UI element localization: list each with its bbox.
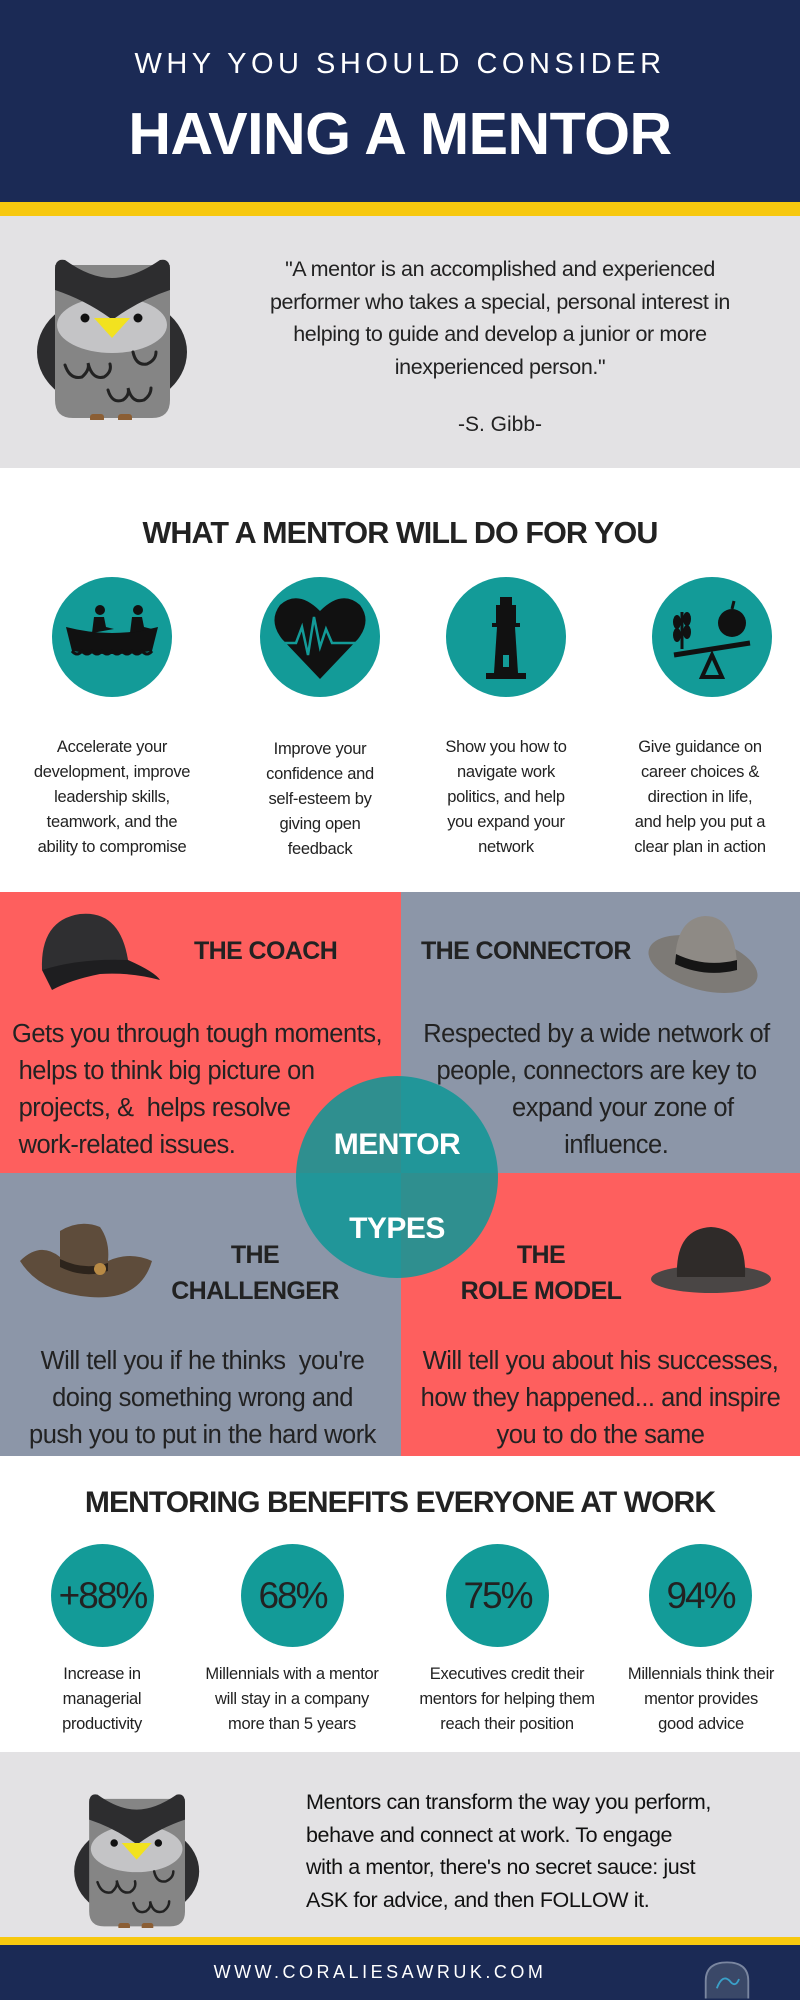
text: show you: you expand your <box>447 813 565 831</box>
text: challenger: Will tell you if he thinks you're <box>41 1347 364 1375</box>
text: coach <box>12 1020 382 1159</box>
icon: canoe <box>52 577 172 697</box>
stat label: 94: good advice <box>658 1715 744 1733</box>
title: the challenger: THE <box>231 1241 279 1269</box>
stat label: 94: Millennials think their <box>628 1665 774 1683</box>
title: the coach: THE COACH <box>194 937 337 965</box>
icon: owl <box>74 1794 200 1928</box>
stat label: 68: more than 5 years <box>228 1715 356 1733</box>
stat label: 68: Millennials with a mentor <box>205 1665 379 1683</box>
title: the role model <box>461 1241 622 1305</box>
text: coach: projects, & helps resolve <box>19 1094 290 1122</box>
text: role model: how they happened... and inspire <box>421 1384 780 1412</box>
stat label: 94: mentor provides <box>644 1690 758 1708</box>
text: improve: feedback <box>288 840 352 858</box>
icon: lighthouse <box>446 577 566 697</box>
title: the challenger: CHALLENGER <box>171 1277 339 1305</box>
text: connector: people, connectors are key to <box>436 1057 757 1085</box>
text: role model: Will tell you about his successes, <box>423 1347 778 1375</box>
quote text: helping to guide and develop a junior or more <box>293 322 707 346</box>
icon: heart <box>260 577 380 697</box>
closing text: Mentors can transform the way you perform, <box>306 1790 711 1814</box>
stat: 88 <box>51 1544 154 1647</box>
text: challenger: doing something wrong and <box>52 1384 353 1412</box>
text: role model <box>421 1347 780 1449</box>
text: improve: Improve your <box>274 740 366 758</box>
text: role model: you to do the same <box>497 1421 704 1449</box>
stat label: 88 <box>62 1665 142 1733</box>
stat: 68: 68% <box>258 1575 327 1616</box>
stat: 94 <box>649 1544 752 1647</box>
text: guidance: clear plan in action <box>634 838 766 856</box>
closing text: ASK for advice, and then FOLLOW it. <box>306 1888 649 1912</box>
stat label: 68: will stay in a company <box>215 1690 369 1708</box>
title: the challenger <box>171 1241 339 1305</box>
stat label: 75: reach their position <box>440 1715 574 1733</box>
text: show you: politics, and help <box>447 788 565 806</box>
text: improve: confidence and <box>266 765 374 783</box>
text: accelerate: development, improve <box>34 763 190 781</box>
quote text: inexperienced person." <box>395 354 605 378</box>
stat label: 88: productivity <box>62 1715 142 1733</box>
text: show you: navigate work <box>457 763 555 781</box>
subtitle: WHY YOU SHOULD CONSIDER <box>134 48 666 80</box>
stat label: 75: mentors for helping them <box>419 1690 595 1708</box>
center circle: mentor types <box>296 1076 498 1278</box>
center circle: mentor types: MENTOR <box>334 1128 460 1161</box>
text: improve: giving open <box>279 815 361 833</box>
icon: baseball cap <box>42 914 160 990</box>
stat label: 68 <box>205 1665 379 1733</box>
section heading: what a mentor will do: WHAT A MENTOR WILL DO FOR YOU <box>143 516 657 550</box>
text: challenger: push you to put in the hard work <box>29 1421 376 1449</box>
yellow stripe <box>0 202 800 216</box>
quote section <box>0 216 800 468</box>
title: the role model: ROLE MODEL <box>461 1277 621 1305</box>
text: connector: influence. <box>564 1131 668 1159</box>
text: guidance: career choices & <box>641 763 759 781</box>
stat: 75 <box>446 1544 549 1647</box>
stat label: 88: Increase in <box>63 1665 141 1683</box>
text: guidance <box>634 738 766 856</box>
stat: 88: +88% <box>59 1575 146 1616</box>
text: coach: work-related issues. <box>19 1131 235 1159</box>
section heading: benefits: MENTORING BENEFITS EVERYONE AT WORK <box>85 1486 715 1519</box>
stat label: 75: Executives credit their <box>430 1665 584 1683</box>
quadrant: challenger <box>0 1173 401 1456</box>
center circle: mentor types: TYPES <box>349 1212 445 1245</box>
text: accelerate: ability to compromise <box>38 838 186 856</box>
text: accelerate <box>34 738 190 856</box>
text: show you: Show you how to <box>445 738 567 756</box>
text: connector: expand your zone of <box>512 1094 734 1122</box>
closing text: with a mentor, there's no secret sauce: just <box>306 1855 695 1879</box>
text: guidance: and help you put a <box>635 813 765 831</box>
text: challenger <box>29 1347 376 1449</box>
footer url: WWW.CORALIESAWRUK.COM <box>214 1962 546 1982</box>
yellow stripe <box>0 1937 800 1945</box>
main title: HAVING A MENTOR <box>128 101 672 167</box>
icon: owl <box>37 260 187 420</box>
quote text: "A mentor is an accomplished and experienced <box>285 257 715 281</box>
stat: 94: 94% <box>666 1575 735 1616</box>
icon: logo <box>704 1962 750 1998</box>
title: the role model: THE <box>517 1241 565 1269</box>
text: guidance: Give guidance on <box>638 738 762 756</box>
text: accelerate: teamwork, and the <box>47 813 177 831</box>
icon: balance <box>652 577 772 697</box>
text: coach: helps to think big picture on <box>19 1057 315 1085</box>
text: improve <box>266 740 374 858</box>
text: connector <box>423 1020 770 1159</box>
stat label: 94 <box>628 1665 774 1733</box>
icon: cowboy hat <box>20 1224 152 1298</box>
panel: mentor types <box>0 892 800 1456</box>
text: improve: self-esteem by <box>268 790 372 808</box>
stat: 75: 75% <box>463 1575 532 1616</box>
header banner <box>0 0 800 202</box>
title: the connector: THE CONNECTOR <box>421 937 631 965</box>
text: accelerate: leadership skills, <box>54 788 170 806</box>
icon: bowler hat <box>651 1227 771 1293</box>
text: show you: network <box>478 838 534 856</box>
text: accelerate: Accelerate your <box>57 738 167 756</box>
quadrant: coach <box>0 892 401 1173</box>
quadrant: connector <box>401 892 800 1173</box>
text: guidance: direction in life, <box>648 788 752 806</box>
stat label: 88: managerial <box>63 1690 141 1708</box>
quote text <box>270 257 730 378</box>
quadrant: role model <box>401 1173 800 1456</box>
quote author: -S. Gibb- <box>458 413 542 436</box>
text: connector: Respected by a wide network of <box>423 1020 770 1048</box>
quote text: performer who takes a special, personal interest in <box>270 290 730 314</box>
text: show you <box>445 738 567 856</box>
icon: fedora <box>648 916 758 993</box>
closing text <box>306 1790 711 1912</box>
stat: 68 <box>241 1544 344 1647</box>
closing section <box>0 1752 800 1937</box>
footer <box>0 1945 800 2000</box>
text: coach: Gets you through tough moments, <box>12 1020 382 1048</box>
stat label: 75 <box>419 1665 595 1733</box>
closing text: behave and connect at work. To engage <box>306 1822 672 1846</box>
